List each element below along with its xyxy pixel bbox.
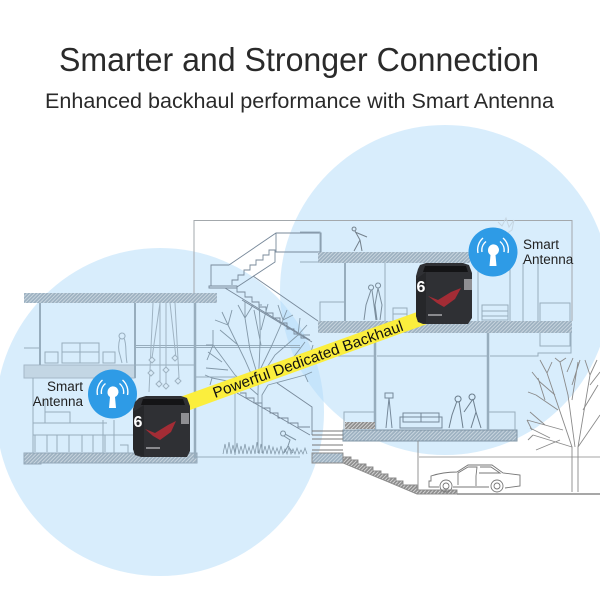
hanging lamps — [148, 303, 181, 392]
sofa and lamp — [385, 393, 442, 428]
person at tree base — [281, 431, 296, 453]
faint figure near right antenna — [498, 218, 514, 234]
couple: lower floor — [449, 394, 481, 428]
planter — [345, 422, 375, 429]
plants at tree base — [223, 442, 307, 454]
left floor slabs — [24, 293, 217, 464]
router: left: 6 — [134, 414, 142, 431]
label: left smart antenna: Smart — [47, 379, 83, 394]
label: right smart antenna: Smart — [523, 237, 559, 252]
right building slabs — [318, 252, 572, 441]
label: left smart antenna: Antenna — [33, 394, 83, 409]
house line drawing — [24, 218, 572, 464]
beam label: Powerful Dedicated Backhaul — [211, 318, 406, 402]
left building walls — [24, 303, 300, 458]
backhaul beam — [180, 312, 427, 410]
antenna icon: right — [468, 228, 518, 276]
right building walls — [300, 232, 571, 430]
router: left — [133, 396, 190, 457]
tree: right — [527, 358, 600, 492]
lower level stairs and garage — [312, 431, 600, 494]
coverage circle: left — [0, 248, 324, 576]
car — [429, 465, 520, 492]
router: right — [416, 263, 472, 324]
title: Smarter and Stronger Connection — [59, 42, 539, 79]
roof outline — [194, 220, 572, 321]
person: left upper floor — [118, 333, 127, 363]
router: right: 6 — [416, 279, 426, 296]
tree: centre — [205, 302, 314, 453]
subtitle: Enhanced backhaul performance with Smart Antenna — [45, 90, 554, 113]
couple: middle floor — [364, 283, 382, 320]
central staircase — [209, 233, 321, 435]
person: top floor — [352, 227, 367, 251]
label: right smart antenna: Antenna — [523, 252, 574, 267]
coverage circle: right — [280, 125, 600, 455]
antenna icon: left — [88, 370, 137, 418]
